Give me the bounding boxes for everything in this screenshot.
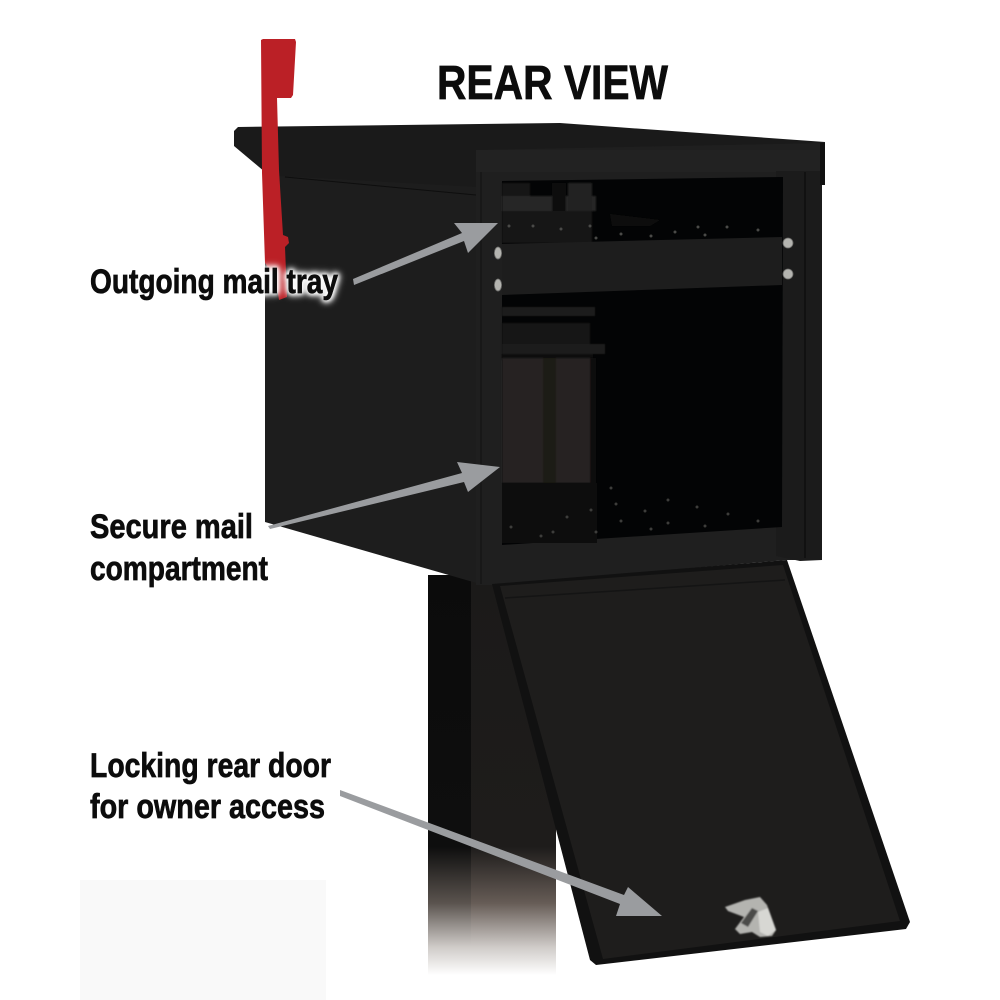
label: locking rear door: Locking rear door [90,747,331,785]
arrow: locking rear door [340,790,662,916]
inner bracket [502,307,605,360]
rear frame [476,143,825,585]
label: locking rear door: for owner access [90,788,325,826]
label: secure mail compartment [90,508,268,588]
inner back panel [502,358,596,483]
tray shelf [502,237,782,295]
label: secure mail compartment: Secure mail [90,508,253,546]
label: outgoing mail tray: Outgoing mail tray [90,263,338,301]
roof [234,123,825,187]
side wall [265,165,480,584]
roof shadow line [285,177,476,195]
door lock [725,897,776,937]
flag [261,39,296,300]
faint base patch [80,880,326,1000]
compartment opening [502,177,783,545]
arrow: secure mail compartment [268,462,500,529]
heading: REAR VIEW [437,57,669,110]
rear door [492,560,910,965]
arrow: outgoing mail tray [353,223,498,285]
tray pegs [508,224,760,240]
post [428,575,556,975]
compartment floor pegs [502,483,760,543]
cap right edge [820,143,825,185]
mailbox body [234,123,825,585]
label: locking rear door [90,747,331,826]
upper tray interior [502,183,660,243]
label: secure mail compartment: compartment [90,550,268,588]
screws [494,238,793,291]
